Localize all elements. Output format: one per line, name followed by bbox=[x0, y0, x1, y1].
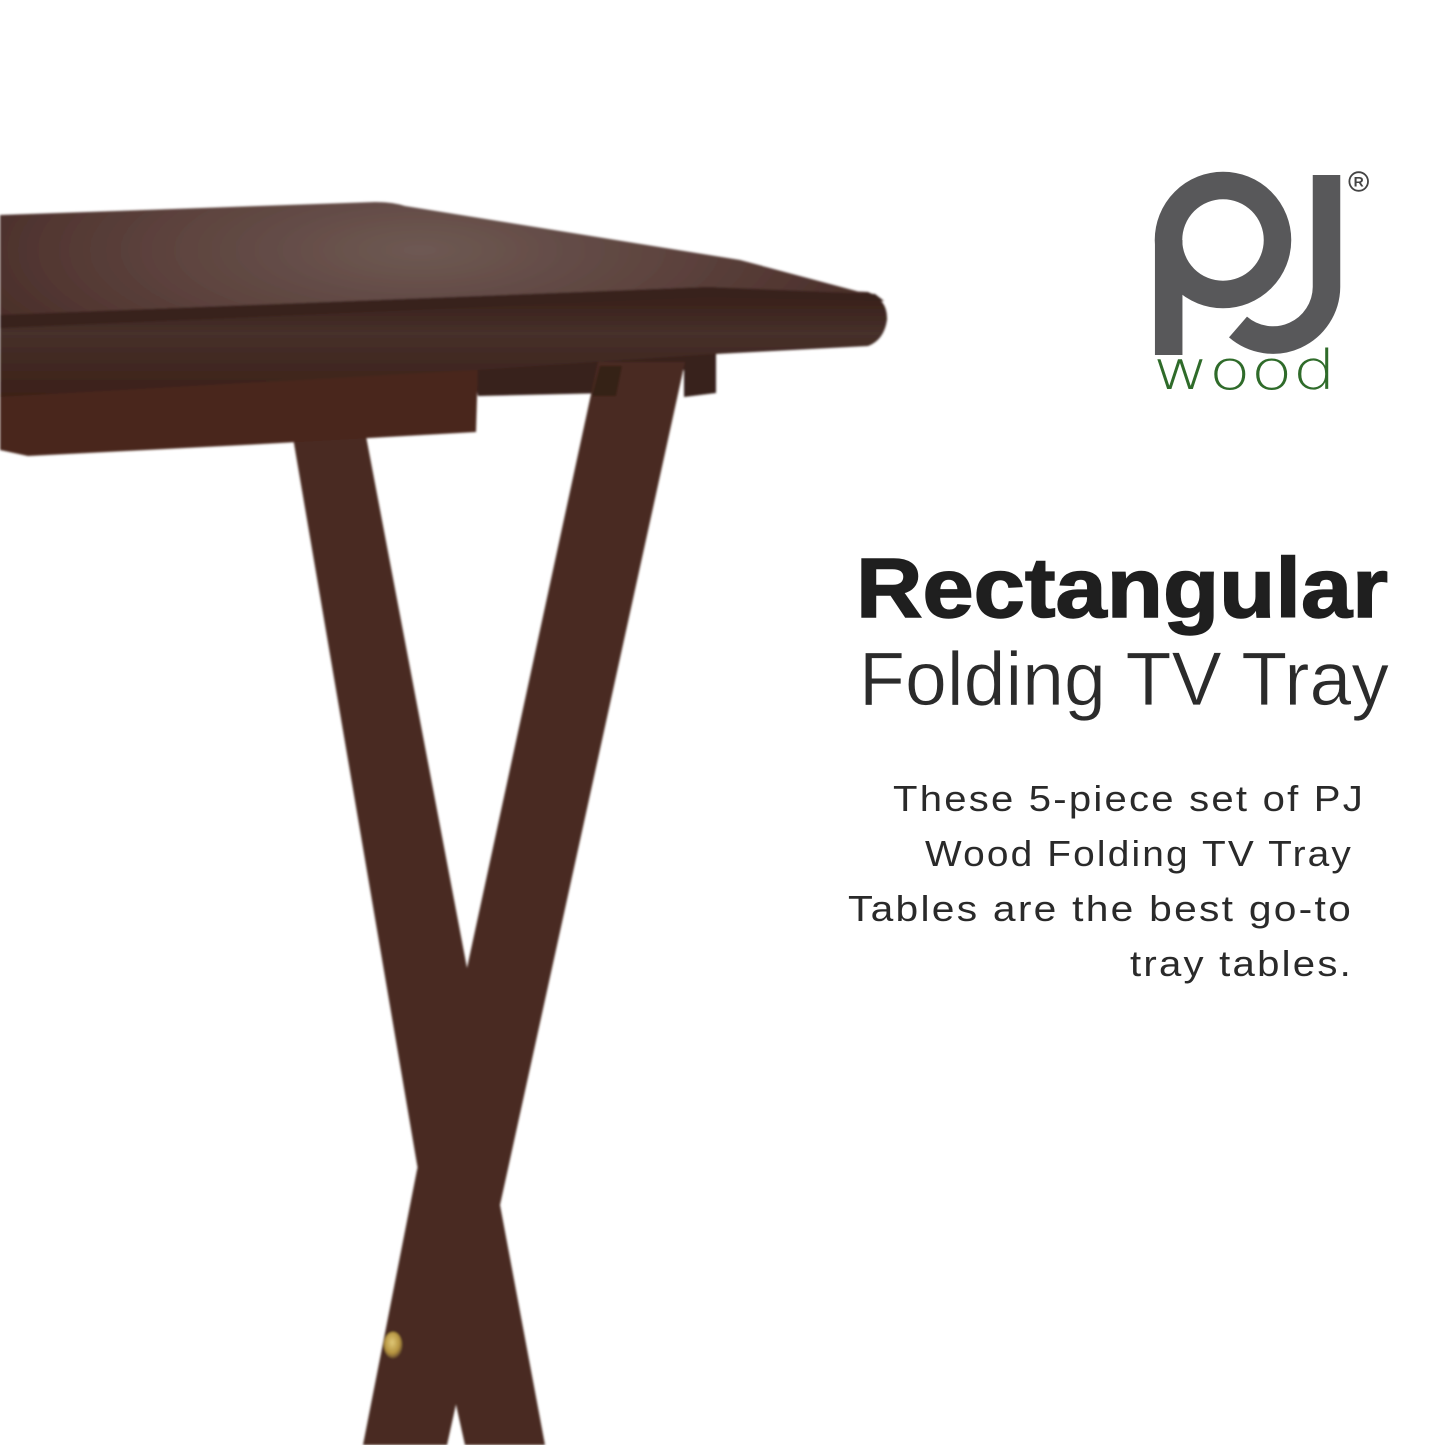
brass hinge screw bbox=[384, 1332, 402, 1358]
logo: PJ Wood bbox=[1153, 172, 1368, 402]
table top: upper surface bbox=[0, 202, 875, 315]
product photo: folding tray table bbox=[0, 202, 887, 1445]
rear apron rail bbox=[470, 345, 716, 397]
front apron rail bbox=[0, 364, 478, 456]
logo wordmark: wood: wood bbox=[1153, 339, 1336, 402]
logo mark: letters p and j bbox=[1168, 175, 1326, 355]
description text bbox=[848, 778, 1365, 984]
heading line: Folding TV Tray: Folding TV Tray bbox=[859, 637, 1389, 722]
table leg: front-slanting leg bbox=[363, 362, 685, 1445]
heading bbox=[856, 541, 1389, 722]
heading line: Rectangular: Rectangular bbox=[856, 541, 1388, 635]
description text: Wood Folding TV Tray bbox=[925, 833, 1353, 874]
dark inner face of front leg bbox=[592, 366, 622, 396]
description text: These 5-piece set of PJ bbox=[893, 778, 1365, 819]
registered trademark mark: R bbox=[1354, 174, 1364, 190]
description text: Tables are the best go-to bbox=[848, 888, 1353, 929]
table top: front edge bbox=[0, 284, 887, 397]
table leg: back-slanting leg bbox=[290, 415, 545, 1445]
registered trademark mark bbox=[1349, 172, 1368, 191]
description text: tray tables. bbox=[1130, 943, 1353, 984]
table top: dark bevel shadow bbox=[0, 287, 884, 328]
